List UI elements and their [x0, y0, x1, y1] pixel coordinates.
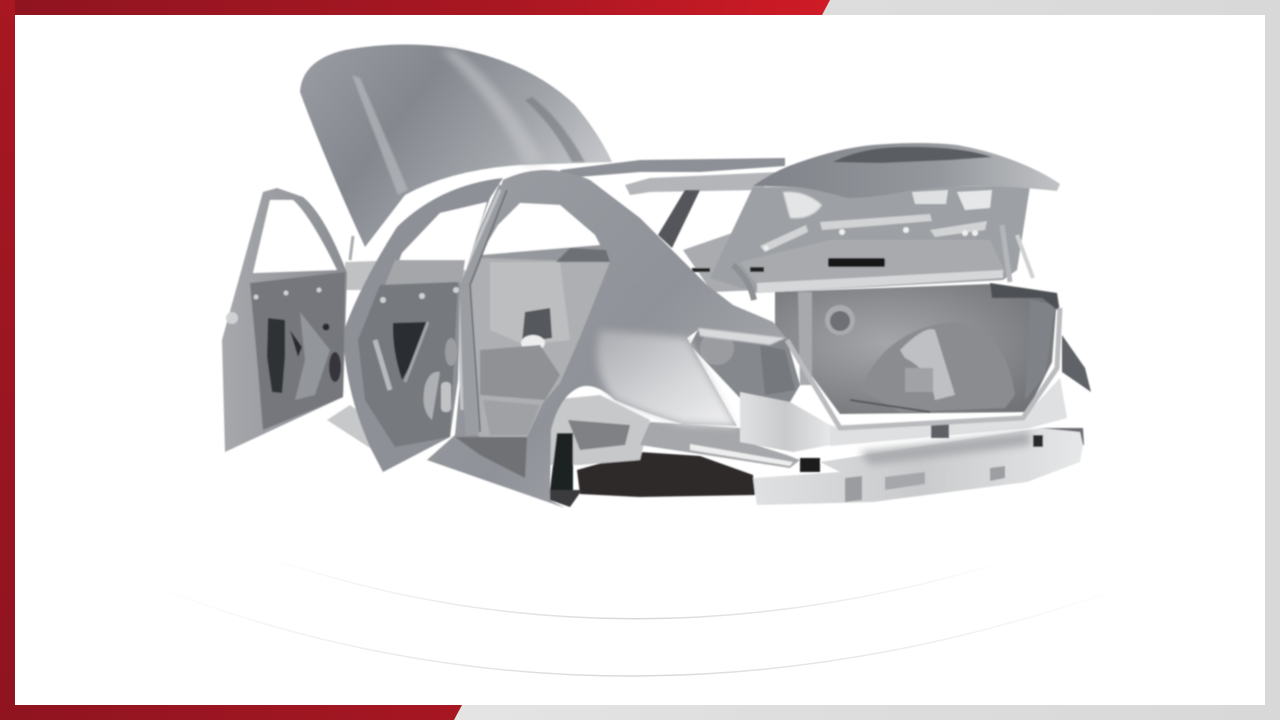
roof frame and far pillars — [327, 158, 785, 448]
centre pillar — [458, 187, 507, 435]
wheel well — [550, 433, 582, 507]
far door — [222, 188, 347, 452]
car body shell — [222, 44, 1091, 508]
rim of trunk — [787, 308, 1060, 428]
trunk interior — [775, 283, 1091, 414]
rear sill and bumper — [740, 378, 1084, 505]
front open door — [343, 178, 503, 472]
trunk lid inner face — [692, 186, 1033, 300]
trunk lid outer skin — [753, 143, 1060, 198]
rear door opening and interior — [455, 203, 610, 478]
quarter panel — [427, 170, 787, 508]
floor rings — [150, 555, 1130, 676]
hood — [300, 44, 612, 247]
underbody and shadow — [550, 395, 800, 497]
tail panel — [690, 330, 800, 402]
